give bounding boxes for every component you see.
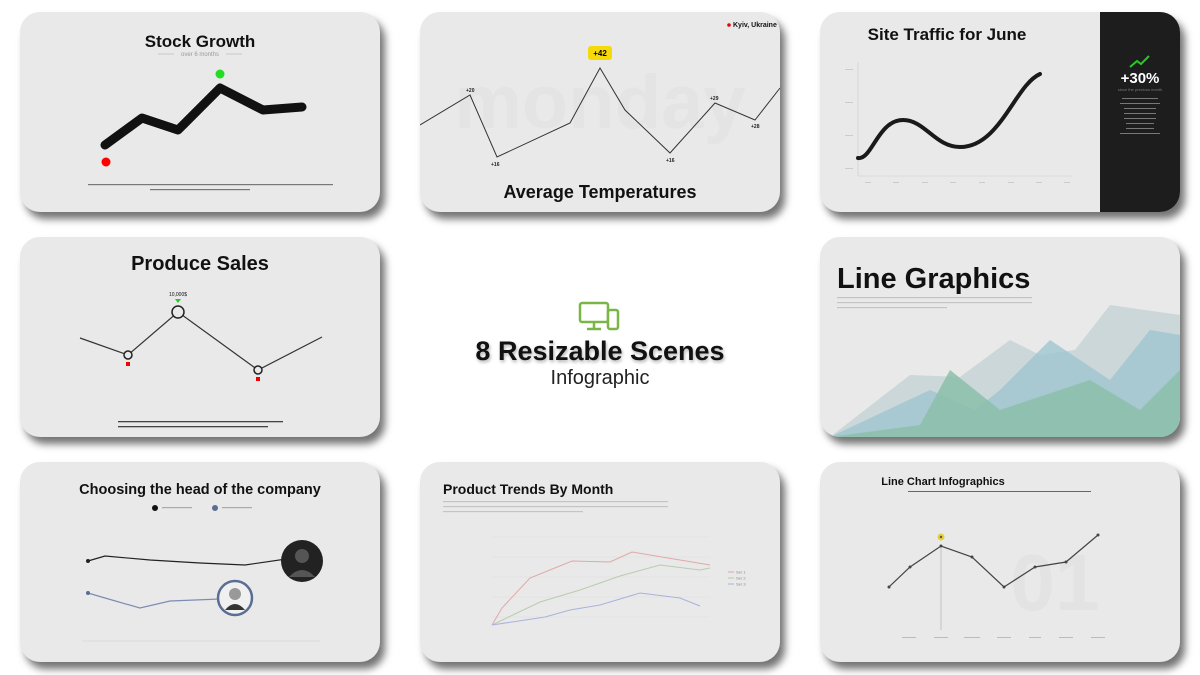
subtitle: over 6 months [181,52,219,58]
icon: green dot [216,70,224,78]
title: Line Graphics [837,263,1030,295]
line chart [105,88,302,145]
labels: +29 [710,96,719,102]
callout: +42: +42 [593,49,607,58]
text block [837,297,1032,308]
dark side panel: since the previous month [1118,87,1162,92]
labels: +16 [491,162,500,168]
panel: product trends [420,462,780,662]
line chart [420,68,780,157]
text block [118,421,283,427]
title: Stock Growth [145,32,255,51]
labels: +20 [466,88,475,94]
labels: +28 [751,124,760,130]
icon: devices [578,302,620,330]
legend [728,570,746,586]
curve chart [858,74,1040,158]
text block [443,501,668,512]
title: Average Temperatures [503,182,697,202]
labels: +16 [666,158,675,164]
title: Line Chart Infographics [881,476,1005,488]
panel: choosing head of company [20,462,380,662]
watermark: 01 [1011,538,1099,627]
title: Product Trends By Month [443,481,613,497]
avatar 1 [281,540,323,582]
legend [152,505,252,511]
panel: site traffic [820,12,1180,212]
watermark: monday [454,60,746,145]
grid [492,537,710,617]
callout: max [169,292,187,303]
center title block [475,302,726,389]
panel: line graphics [820,237,1180,437]
guide line [940,548,942,630]
panel: line chart infographics [820,462,1180,662]
title: Site Traffic for June [868,25,1026,44]
avatar 2 [218,581,252,615]
legend: Ser 1 [736,570,746,574]
callout: max: 10,000$ [169,292,187,298]
icon: red dot [102,158,110,166]
line chart [889,535,1098,587]
area chart [830,305,1180,437]
icon: trend arrow [1130,56,1149,67]
stat: +30% [1121,70,1159,87]
subheading: Infographic [551,367,649,389]
line chart [492,552,710,625]
panel: average temperatures [420,12,780,212]
line chart [88,556,300,608]
panel: produce sales [20,237,380,437]
line chart [80,312,322,370]
markers [124,306,262,374]
text block [88,184,333,190]
title: Choosing the head of the company [79,482,321,498]
panel: stock growth [20,12,380,212]
labels [466,88,760,168]
axes [858,62,1072,176]
marker badge [938,534,944,540]
legend: Ser 3 [736,582,746,586]
icon: red markers [126,362,260,381]
title: Produce Sales [131,253,269,275]
axis [82,640,320,642]
callout: +42 [588,46,612,60]
subtitle [158,52,242,58]
location: Kyiv, Ukraine [733,22,777,29]
dark side panel [1100,12,1180,212]
heading: 8 Resizable Scenes [475,336,725,366]
x labels [902,637,1105,638]
legend: Ser 2 [736,576,746,580]
